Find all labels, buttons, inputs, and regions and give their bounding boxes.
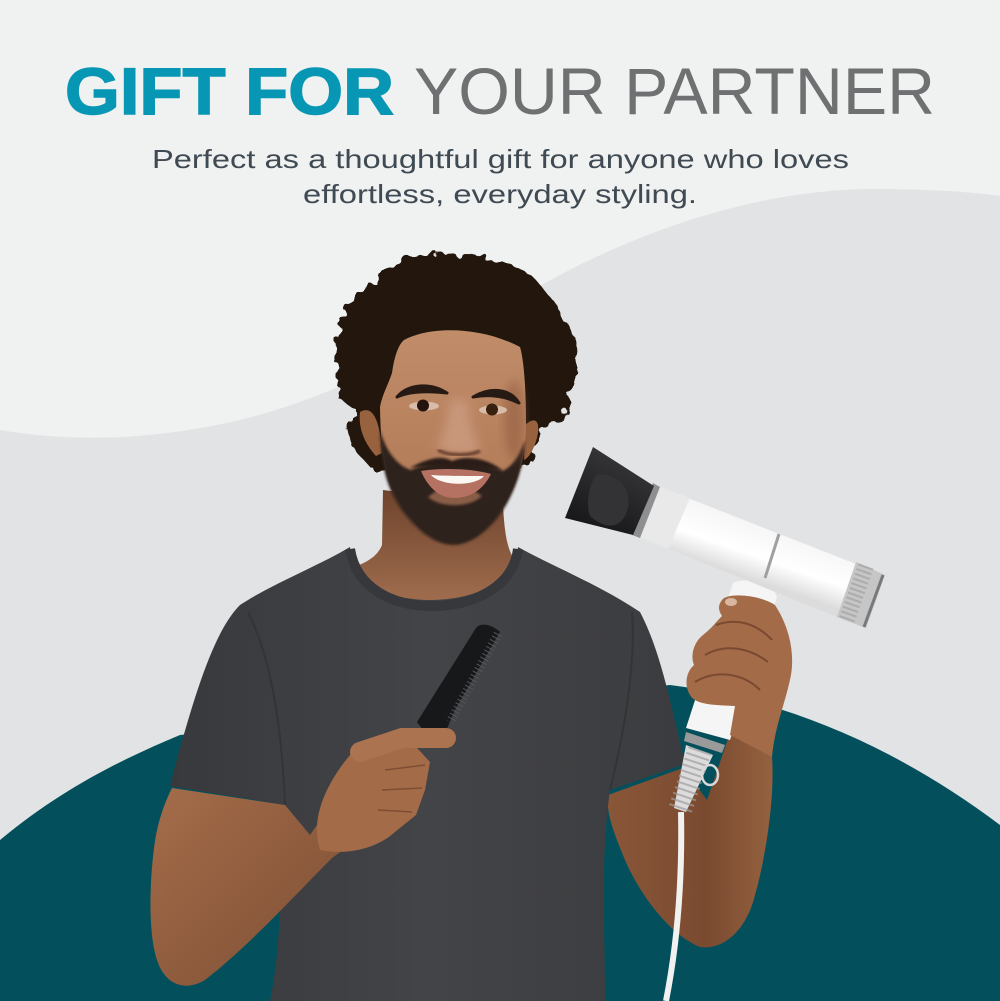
- man with comb and dryer: [150, 253, 885, 1001]
- barrel: [640, 487, 884, 628]
- finger nail: [725, 598, 737, 606]
- right cheek shadow: [504, 380, 524, 460]
- beard: [380, 430, 525, 545]
- finger creases: [378, 765, 425, 812]
- subtitle: effortless, everyday styling.: [303, 179, 697, 209]
- comb: [417, 625, 500, 745]
- nostril shadow: [438, 450, 480, 455]
- nose highlight: [438, 400, 480, 454]
- finger creases: [695, 622, 772, 690]
- head hair: [335, 253, 577, 470]
- right arm: [608, 733, 773, 947]
- subtitle: [152, 144, 849, 209]
- cord strain relief: [674, 745, 713, 812]
- comb teeth: [450, 634, 498, 722]
- subtitle: Perfect as a thoughtful gift for anyone who loves: [152, 144, 849, 174]
- ribbed collar: [640, 487, 690, 549]
- hand holding comb: [317, 735, 446, 852]
- neck: [345, 490, 525, 625]
- hand holding dryer: [687, 595, 792, 757]
- lower lip skin patch: [428, 488, 482, 505]
- shirt collar: [350, 549, 518, 606]
- title: GIFT FOR: [65, 54, 394, 128]
- eyes: [409, 400, 507, 416]
- teeth: [431, 475, 484, 484]
- sleeve fold: [248, 612, 633, 805]
- face: [380, 330, 526, 543]
- teal arc: [0, 685, 1000, 1001]
- handle ring: [684, 732, 725, 753]
- nozzle highlight: [588, 474, 629, 526]
- cord loop: [702, 765, 718, 785]
- nozzle: [565, 447, 654, 535]
- knurled end: [837, 562, 885, 628]
- barrel seam: [765, 534, 779, 578]
- cord: [666, 812, 681, 1001]
- title: [65, 54, 935, 128]
- moustache: [410, 458, 503, 471]
- t-shirt: [170, 547, 685, 1001]
- handle: [686, 580, 777, 740]
- smile: [421, 469, 491, 498]
- hair dryer: [565, 447, 885, 1001]
- title: YOUR PARTNER: [414, 54, 935, 128]
- left arm: [150, 785, 350, 986]
- chrome ring: [632, 483, 660, 538]
- ears: [360, 410, 538, 460]
- eyebrows: [397, 386, 519, 403]
